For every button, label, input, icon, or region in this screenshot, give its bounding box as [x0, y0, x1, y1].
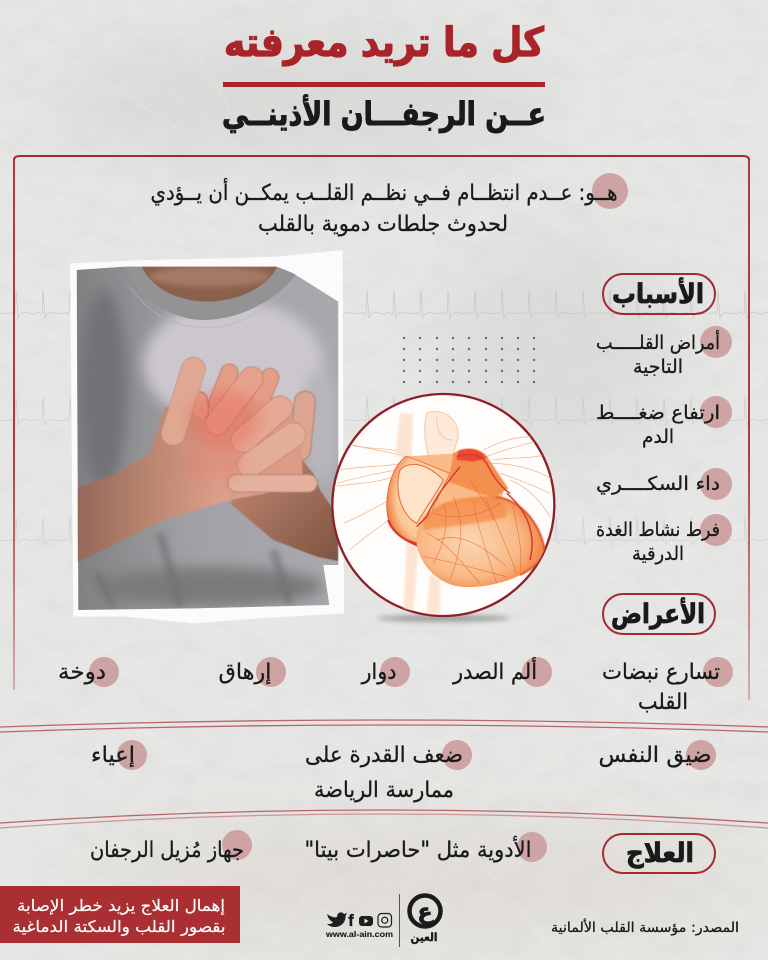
- back of hand and forearm: [78, 407, 280, 562]
- symptom: exhaustion: إرهاق: [218, 660, 272, 685]
- symptom: reduced exercise capacity: [305, 740, 472, 803]
- cause: hyperthyroidism: [596, 514, 732, 565]
- cause: coronary disease: التاجية: [633, 356, 683, 378]
- symptom: lightheadedness: دوخة: [58, 660, 106, 685]
- definition line 1: هــو: عــدم انتظــام فــي نظــم القلــب يمكــن أن يــؤدي: [150, 178, 618, 206]
- cause: high blood pressure: الدم: [642, 426, 674, 448]
- cause: high blood pressure: [596, 396, 732, 448]
- heart illustration: [332, 394, 554, 622]
- source: المصدر: مؤسسة القلب الألمانية: [551, 918, 739, 936]
- rear fingers: [199, 373, 270, 412]
- heart underlay: [402, 454, 503, 510]
- symptom: exhaustion: [218, 657, 286, 687]
- ventricles: [416, 497, 545, 587]
- cause: hyperthyroidism: فرط نشاط الغدة: [596, 519, 720, 541]
- heading: treatment: [603, 834, 715, 873]
- cause: hyperthyroidism: الدرقية: [632, 543, 684, 565]
- treatment: defibrillator: جهاز مُزيل الرجفان: [90, 838, 244, 863]
- logo: Al-Ain: ع: [417, 900, 433, 925]
- cause: high blood pressure: ارتفاع ضغــــط: [596, 402, 720, 424]
- social icons and website: f: [348, 911, 354, 930]
- symptom: palpitations: [602, 657, 733, 715]
- symptom: dizziness: [361, 657, 410, 687]
- panel: causes: [596, 274, 732, 565]
- logo: Al-Ain: العين: [410, 931, 438, 944]
- chest pain glow: [187, 390, 260, 450]
- under-hand thumb: [300, 402, 305, 450]
- panel: symptoms: [58, 594, 733, 803]
- cause: coronary disease: أمراض القلـــــب: [596, 330, 720, 354]
- coronary arteries: [407, 455, 532, 560]
- cause: diabetes: داء السكــــري: [596, 473, 720, 495]
- symptom: palpitations: تسارع نبضات: [602, 660, 720, 685]
- neck: [140, 263, 278, 302]
- callout: warning: [0, 886, 240, 943]
- logo divider: [399, 894, 400, 947]
- panel: treatment: [90, 830, 715, 873]
- symptom: reduced exercise capacity: ممارسة الرياضة: [314, 778, 454, 803]
- lower arm: [230, 453, 338, 561]
- symptom: shortness of breath: ضيق النفس: [598, 743, 712, 768]
- cause: coronary disease: [596, 326, 732, 378]
- definition text: [150, 173, 628, 209]
- heading: symptoms: [603, 594, 715, 634]
- heading: symptoms: الأعراض: [611, 597, 705, 630]
- heading: causes: الأسباب: [612, 277, 704, 310]
- heading: treatment: العلاج: [626, 838, 694, 869]
- collar: [125, 265, 297, 320]
- callout: warning: بقصور القلب والسكتة الدماغية: [12, 917, 226, 937]
- palm backing: [207, 397, 303, 500]
- treatment: beta blockers: الأدوية مثل "حاصرات بيتا": [304, 836, 532, 863]
- symptom: dizziness: دوار: [361, 660, 396, 685]
- symptom: chest pain: ألم الصدر: [452, 657, 537, 685]
- symptom: palpitations: القلب: [638, 690, 688, 715]
- right atrium: [387, 456, 450, 547]
- subtitle: عــن الرجفـــان الأذينــي: [222, 94, 546, 133]
- callout: warning: إهمال العلاج يزيد خطر الإصابة: [17, 896, 225, 916]
- title divider bar: [223, 82, 545, 87]
- content frame: [14, 156, 749, 700]
- title: كل ما تريد معرفته: [224, 20, 545, 66]
- vessels: [333, 437, 553, 550]
- symptom: reduced exercise capacity: ضعف القدرة على: [305, 743, 463, 768]
- logo: Al-Ain: [410, 896, 440, 944]
- definition line 2: لحدوث جلطات دموية بالقلب: [258, 212, 508, 237]
- aorta: [424, 411, 459, 456]
- cause: diabetes: [596, 468, 732, 500]
- bullet: definition: [592, 173, 628, 209]
- social icons and website: www.al-ain.com: [325, 930, 393, 939]
- dot grid: [403, 337, 535, 383]
- top fingers: [173, 369, 308, 483]
- symptom: fatigue: إعياء: [91, 743, 135, 768]
- left atrium: [448, 449, 508, 498]
- symptom: lightheadedness: [58, 657, 119, 687]
- social icons and website: [325, 911, 393, 939]
- symptom: fatigue: [91, 740, 147, 770]
- photo: hands on chest: [70, 250, 344, 623]
